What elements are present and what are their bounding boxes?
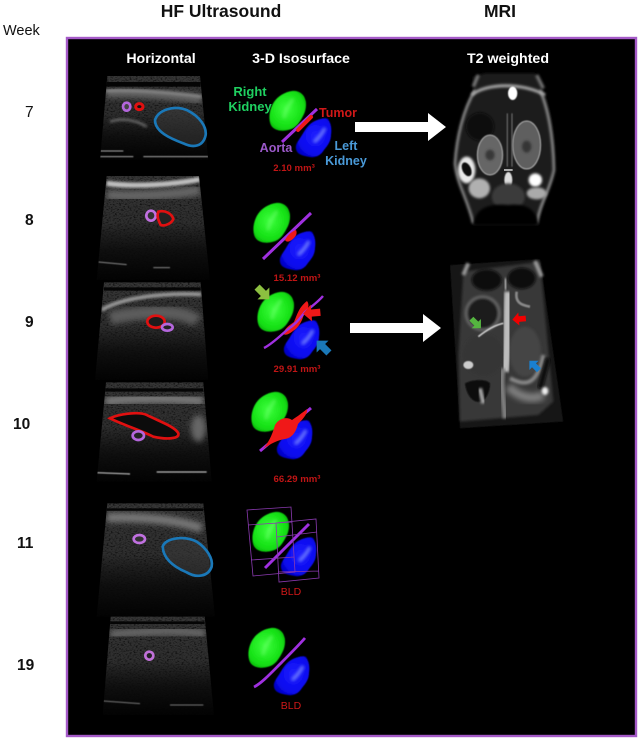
- tumour outline: blue: [155, 108, 206, 146]
- tumour outline: [147, 316, 165, 328]
- isosurface: week 19: [248, 628, 309, 695]
- tumour outline: blue: [163, 538, 212, 576]
- aorta outline: [145, 652, 153, 660]
- ultrasound: week 11: [98, 503, 214, 602]
- arrow: tumor marker: [302, 304, 321, 322]
- tumour outline: [158, 211, 173, 225]
- ultrasound: week 9: [96, 282, 207, 367]
- week labels: 10: [13, 416, 30, 433]
- sub-heading: T2 weighted: T2 weighted: [467, 51, 549, 67]
- week labels: 19: [17, 657, 35, 674]
- aorta outline: [146, 211, 156, 221]
- isosurface: week 11 with bounding boxes: [247, 507, 319, 582]
- week labels: 8: [25, 212, 34, 229]
- label: kidney (right): Kidney: [228, 99, 272, 114]
- ultrasound: week 7: [100, 76, 208, 160]
- MRI: week 9 coronal: [450, 259, 563, 428]
- tumor volume: week 7: 2.10 mm³: [273, 163, 315, 174]
- tumour outline: red: [136, 104, 143, 110]
- week labels: 7: [25, 104, 34, 121]
- label: left: Left: [335, 139, 358, 153]
- arrow: week 7 to MRI: [355, 113, 446, 141]
- aorta outline: [123, 103, 130, 111]
- label: kidney (left): Kidney: [325, 154, 367, 168]
- aorta outline: [162, 324, 173, 331]
- arrow: tumor on MRI: [512, 312, 526, 326]
- column heading: week: Week: [3, 23, 41, 39]
- arrow: left kidney marker: [311, 335, 335, 359]
- week labels: [13, 104, 35, 674]
- isosurface: week 10: [251, 392, 312, 459]
- label: tumor: Tumor: [319, 106, 357, 120]
- result: week 11: BLD: [281, 586, 302, 598]
- tumor volume: week 9: 29.91 mm³: [274, 364, 320, 375]
- arrow: week 9 to MRI: [350, 314, 441, 342]
- tumor volume: week 8: 15.12 mm³: [274, 273, 320, 284]
- aorta outline: [134, 535, 145, 543]
- sub-heading: horizontal: Horizontal: [126, 51, 196, 67]
- week labels: 11: [17, 535, 34, 552]
- tumour outline: [110, 413, 178, 438]
- arrow: kidney on MRI: [467, 314, 486, 333]
- label: right kidney: Right: [233, 84, 267, 99]
- sub-heading: 3-D isosurface: 3-D Isosurface: [252, 51, 350, 67]
- isosurface: week 9: [257, 292, 323, 359]
- isosurface: week 7: [269, 91, 331, 157]
- column heading: MRI: MRI: [484, 1, 516, 21]
- result: week 19: BLD: [281, 700, 302, 712]
- isosurface: week 8: [253, 203, 315, 270]
- ultrasound: week 19: [104, 616, 212, 706]
- arrow: left kidney on MRI: [525, 356, 544, 375]
- MRI: week 7 coronal: [455, 73, 554, 225]
- label: aorta: Aorta: [260, 141, 293, 155]
- column heading: HF ultrasound: HF Ultrasound: [161, 1, 281, 21]
- aorta outline: [133, 431, 144, 440]
- ultrasound: week 10: [97, 382, 212, 482]
- week labels: 9: [25, 314, 34, 331]
- arrow: kidney marker: [251, 281, 275, 305]
- ultrasound: week 8: [98, 176, 208, 270]
- tumor volume: week 10: 66.29 mm³: [274, 474, 320, 485]
